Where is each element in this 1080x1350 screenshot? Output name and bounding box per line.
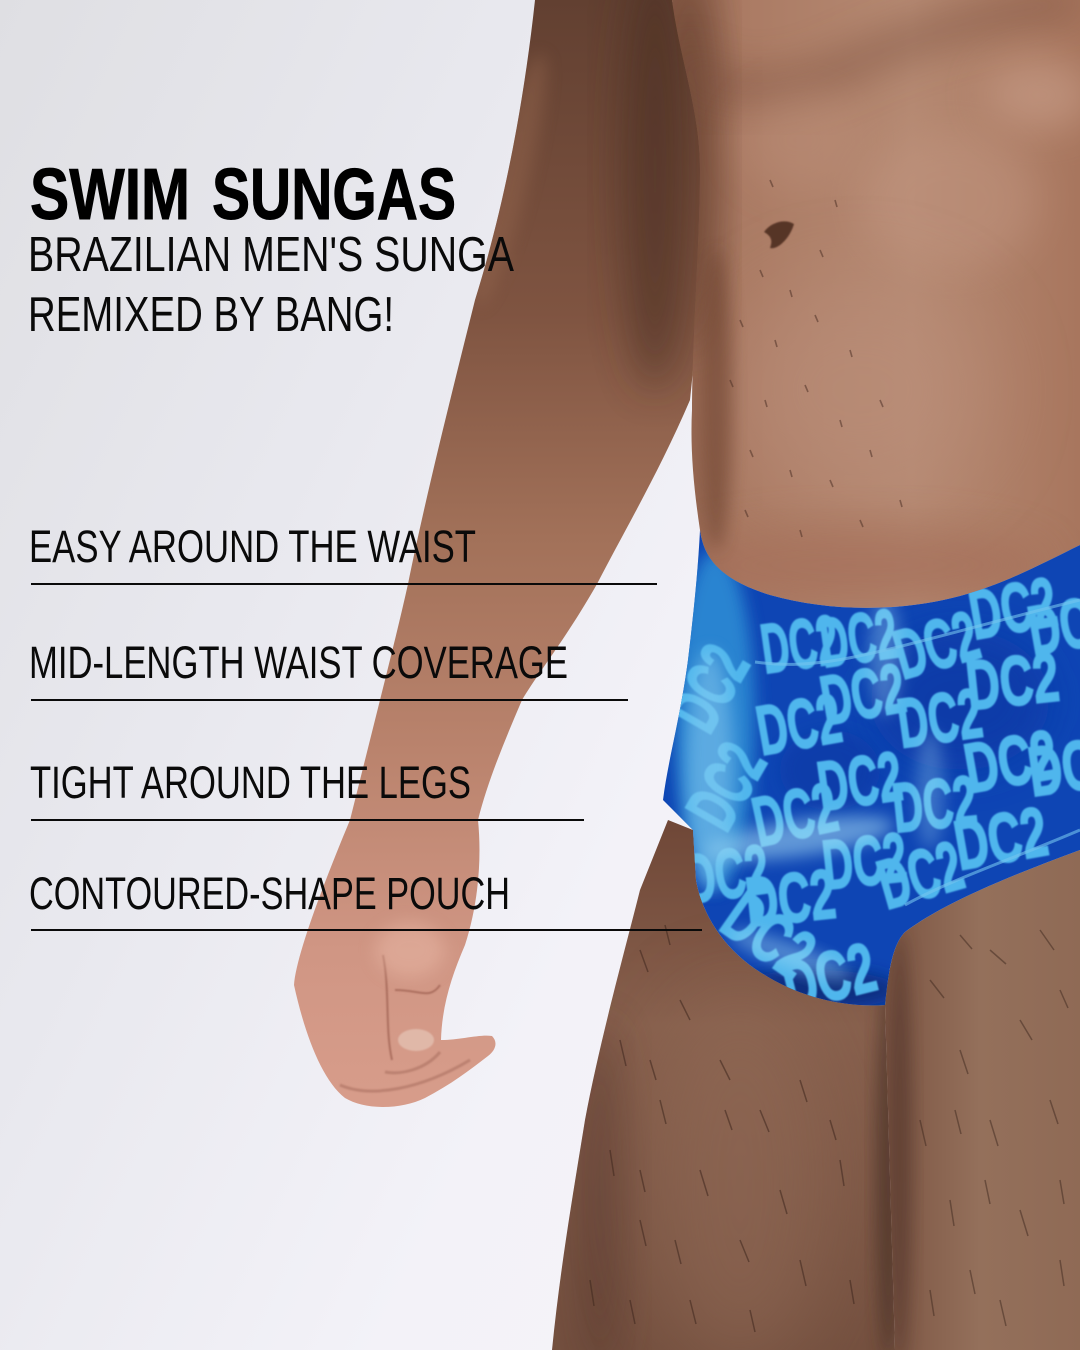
pattern: DC2 lettering: DC2	[893, 675, 987, 763]
title: SWIM	[30, 155, 190, 235]
feature: tight around the legs: TIGHT AROUND THE LEGS	[30, 757, 471, 808]
pattern: DC2 lettering: DC2	[813, 738, 907, 826]
pattern: DC2 lettering: DC2	[870, 827, 972, 925]
title: SUNGAS	[212, 155, 456, 235]
pattern: DC2 lettering: DC2	[819, 819, 910, 905]
feature: mid-length waist coverage: MID-LENGTH WAIST COVERAGE	[29, 637, 568, 688]
pattern: DC2 lettering: DC2	[886, 597, 988, 695]
pattern: DC2 lettering: DC2	[889, 762, 980, 848]
pattern: DC2 lettering: DC2	[746, 769, 844, 862]
photo: swim brief with DC2 print	[655, 520, 1080, 1026]
pattern: DC2 lettering: DC2	[655, 633, 765, 744]
subtitle: REMIXED BY BANG!	[28, 288, 394, 342]
body hair	[730, 180, 902, 537]
pattern: DC2 lettering: DC2	[708, 876, 829, 994]
pattern: DC2 lettering: DC2	[775, 927, 884, 1026]
pattern: DC2 lettering	[678, 576, 1080, 1002]
pattern: DC2 lettering: DC2	[742, 856, 839, 942]
icon: thumbnail	[398, 1029, 434, 1051]
pattern: DC2 lettering: DC2	[958, 714, 1063, 808]
icon: navel	[764, 221, 794, 248]
pattern: DC2 lettering: DC2	[756, 600, 843, 688]
pattern: DC2 lettering: DC2	[672, 731, 782, 842]
photo: arm and hand	[280, 0, 710, 1120]
pattern: DC2 lettering: DC2	[963, 563, 1062, 655]
pattern: DC2 lettering: DC2	[680, 831, 774, 919]
pattern: DC2 lettering: DC2	[751, 680, 847, 771]
title	[30, 155, 456, 235]
subtitle: BRAZILIAN MEN'S SUNGA	[28, 228, 514, 282]
pattern: DC2 lettering: DC2	[815, 650, 911, 741]
pattern: DC2 lettering: DC2	[962, 637, 1063, 725]
pattern: DC2 lettering: DC2	[948, 791, 1053, 885]
photo: torso	[660, 0, 1080, 620]
photo: right leg	[880, 850, 1080, 1350]
subtitle	[28, 228, 514, 342]
pattern: DC2 lettering: DC2	[815, 594, 902, 682]
photo: left leg	[540, 810, 910, 1350]
feature: easy around the waist: EASY AROUND THE WAIST	[29, 521, 476, 572]
feature: contoured-shape pouch: CONTOURED-SHAPE POUCH	[29, 868, 510, 919]
